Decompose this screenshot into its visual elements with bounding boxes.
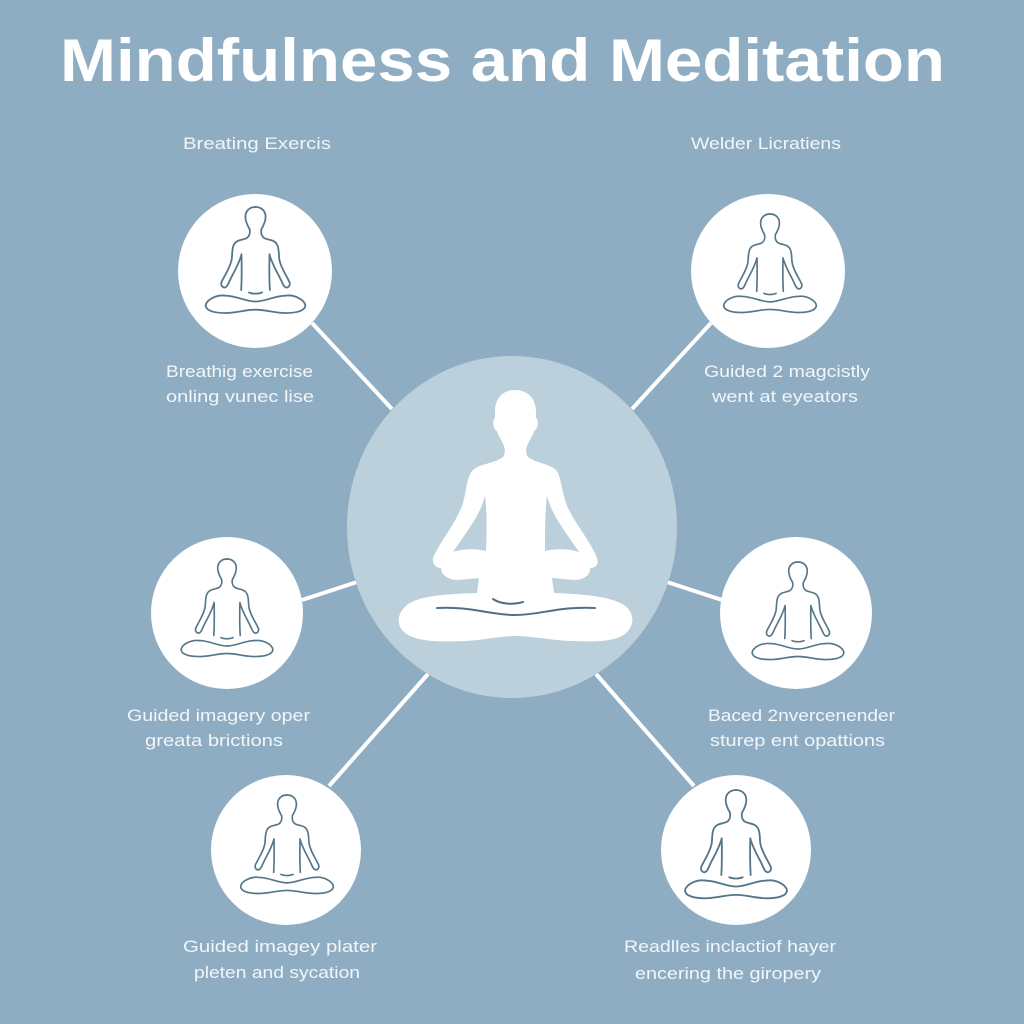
icon: meditating figure outline (181, 559, 273, 657)
column heading: right: Welder Licratiens (691, 134, 841, 153)
icon: central meditating silhouette (399, 390, 632, 641)
panel: middle left node (151, 537, 303, 689)
panel: middle right node (720, 537, 872, 689)
column heading: left: Breating Exercis (183, 134, 331, 153)
label: top left (166, 362, 314, 406)
label: middle left: greata brictions (145, 731, 283, 750)
panel: bottom left node (211, 775, 361, 925)
panel: top left node (178, 194, 332, 348)
icon: meditating figure outline (206, 207, 305, 313)
label: middle right: Baced 2nvercenender (708, 706, 895, 725)
title: Mindfulness and Meditation (60, 27, 945, 94)
label: top right (704, 362, 871, 406)
label: top left: Breathig exercise (166, 362, 313, 381)
label: top right: went at eyeators (711, 387, 858, 406)
icon: meditating figure outline (241, 795, 333, 894)
icon: meditating figure outline (685, 790, 787, 898)
label: bottom left (183, 937, 377, 982)
label: top right: Guided 2 magcistly (704, 362, 871, 381)
panel: bottom right node (661, 775, 811, 925)
label: middle right (708, 706, 895, 750)
icon: meditating figure outline (724, 214, 816, 313)
connector lines (302, 323, 722, 786)
label: middle right: sturep ent opattions (710, 731, 885, 750)
label: middle left: Guided imagery oper (127, 706, 310, 725)
label: middle left (127, 706, 310, 750)
label: top left: onling vunec lise (166, 387, 314, 406)
icon: meditating figure outline (752, 562, 844, 660)
label: bottom left: Guided imagey plater (183, 937, 377, 956)
label: bottom right (624, 937, 836, 983)
central circle with meditating figure (347, 356, 677, 698)
label: bottom right: Readlles inclactiof hayer (624, 937, 836, 956)
panel: top right node (691, 194, 845, 348)
label: bottom right: encering the giropery (635, 964, 822, 983)
label: bottom left: pleten and sycation (194, 963, 360, 982)
